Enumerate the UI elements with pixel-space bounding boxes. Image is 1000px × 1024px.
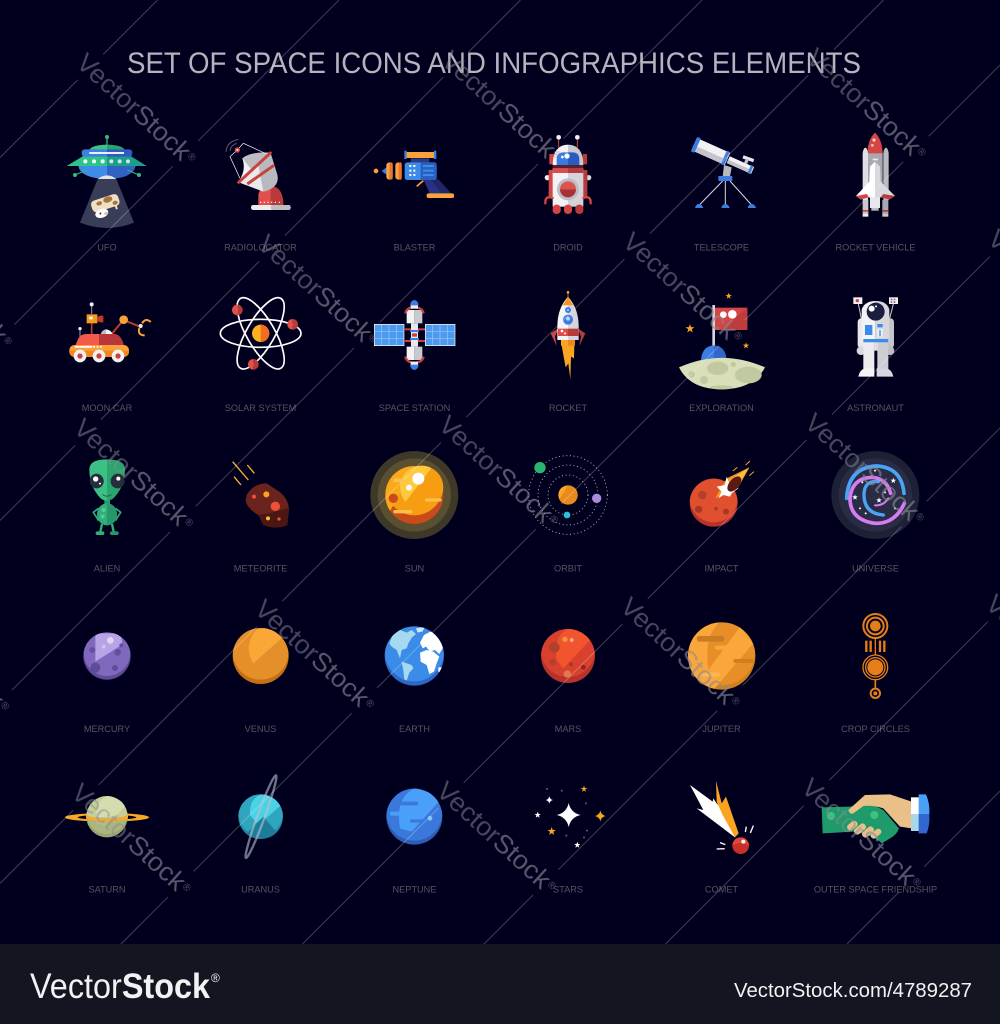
labels: EARTH (399, 724, 430, 734)
labels: SATURN (88, 884, 126, 894)
icon: meteorite (233, 462, 289, 527)
watermark text: ® (915, 146, 928, 160)
watermark text: VectorStock (796, 772, 923, 892)
labels: OUTER SPACE FRIENDSHIP (814, 884, 937, 894)
icon: universe galaxy (831, 451, 919, 539)
icon: alien (88, 459, 127, 535)
labels: CROP CIRCLES (841, 724, 910, 734)
watermark text: ® (550, 149, 563, 162)
labels: STARS (553, 884, 583, 894)
icon: space station (374, 300, 455, 370)
watermark text: VectorStock (249, 593, 376, 713)
icon: jupiter planet (687, 618, 757, 690)
icon: blaster (374, 151, 454, 198)
cow (90, 193, 123, 220)
icon: crop circles (863, 614, 888, 698)
watermark text: ® (185, 151, 198, 165)
labels: DROID (553, 242, 583, 252)
icon group: row 1 left, UFO radiolocator blaster moon car solar system space station (67, 135, 455, 375)
labels: ORBIT (554, 564, 582, 574)
watermark text: ® (545, 879, 558, 893)
footer logo: VectorStock (30, 967, 210, 1006)
labels: JUPITER (702, 724, 741, 734)
title: SET OF SPACE ICONS AND INFOGRAPHICS ELEMENTS (127, 47, 861, 80)
icon: comet (690, 781, 753, 854)
icon: UFO (67, 135, 147, 228)
icon group: alien meteorite sun mercury venus earth (83, 451, 458, 686)
icon: uranus planet (238, 774, 283, 859)
labels: RADIOLOCATOR (224, 242, 297, 252)
footer bar: ® (211, 971, 220, 985)
icon group: saturn uranus neptune (65, 774, 443, 859)
watermark text: ® (182, 516, 195, 530)
icon: orbit (529, 456, 607, 534)
labels: SUN (405, 564, 424, 574)
footer bar (0, 944, 1000, 1024)
labels: UFO (97, 242, 117, 252)
icon group: orbit impact universe mars jupiter crop circles (529, 451, 919, 698)
icon: exploration flag on moon (679, 293, 765, 389)
labels (82, 242, 937, 894)
icon: solar system atom (220, 291, 301, 375)
labels: MOON CAR (82, 403, 133, 413)
icon: mercury planet (83, 629, 131, 680)
watermark text: VectorStock (436, 44, 563, 164)
labels: NEPTUNE (393, 884, 436, 894)
watermark text: ® (913, 511, 926, 525)
labels: EXPLORATION (689, 403, 754, 413)
icon: moon car (69, 302, 151, 362)
watermark text: ® (910, 876, 923, 890)
icon: stars (534, 786, 606, 848)
icon: saturn planet (65, 793, 149, 837)
icon group: droid telescope rocket vehicle rocket exploration astronaut (545, 133, 898, 389)
labels: VENUS (245, 724, 276, 734)
labels: SOLAR SYSTEM (225, 403, 296, 413)
watermark text: ® (1, 335, 14, 348)
icon: rocket vehicle (856, 133, 895, 217)
icon: rocket (551, 291, 585, 379)
watermark text: VectorStock (431, 775, 558, 895)
labels: METEORITE (234, 564, 287, 574)
labels: TELESCOPE (694, 242, 749, 252)
icon: radiolocator (226, 139, 291, 210)
watermark text: VectorStock (252, 228, 379, 348)
watermark text: ® (366, 332, 379, 346)
icon: astronaut (853, 297, 898, 377)
icon: outer space friendship handshake (822, 794, 929, 843)
labels: ROCKET (549, 403, 588, 413)
watermark text: VectorStock (433, 409, 560, 529)
labels: BLASTER (394, 242, 436, 252)
icon: mars planet (541, 623, 595, 683)
watermark text: VectorStock (71, 47, 198, 167)
icon: venus planet (233, 624, 289, 684)
labels: URANUS (241, 884, 280, 894)
labels: UNIVERSE (852, 564, 899, 574)
icon: earth planet (385, 622, 447, 686)
labels: ROCKET VEHICLE (836, 242, 916, 252)
labels: IMPACT (704, 564, 739, 574)
labels: MARS (555, 724, 581, 734)
watermark text: ® (547, 513, 560, 527)
watermark text: VectorStock (799, 407, 926, 527)
watermark text: ® (180, 881, 193, 895)
labels: SPACE STATION (379, 403, 450, 413)
watermark text: VectorStock (68, 412, 195, 532)
labels: ALIEN (94, 564, 120, 574)
watermark text: ® (729, 695, 742, 709)
icon group: stars comet handshake (534, 781, 929, 854)
watermark text: VectorStock (617, 226, 744, 346)
labels: COMET (705, 884, 738, 894)
labels: MERCURY (84, 724, 130, 734)
watermark text: ® (363, 697, 376, 711)
footer bar: VectorStock.com/4789287 (734, 980, 972, 1002)
icon: droid (545, 135, 591, 214)
icon: impact (690, 461, 754, 527)
watermark text: VectorStock (66, 777, 193, 897)
watermark text: VectorStock (801, 42, 928, 162)
labels: ASTRONAUT (847, 403, 904, 413)
icon: telescope (691, 134, 757, 208)
icon: sun (370, 451, 458, 539)
icon: neptune planet (386, 785, 443, 845)
watermark text: VectorStock (615, 591, 742, 711)
watermark text: ® (731, 330, 744, 344)
